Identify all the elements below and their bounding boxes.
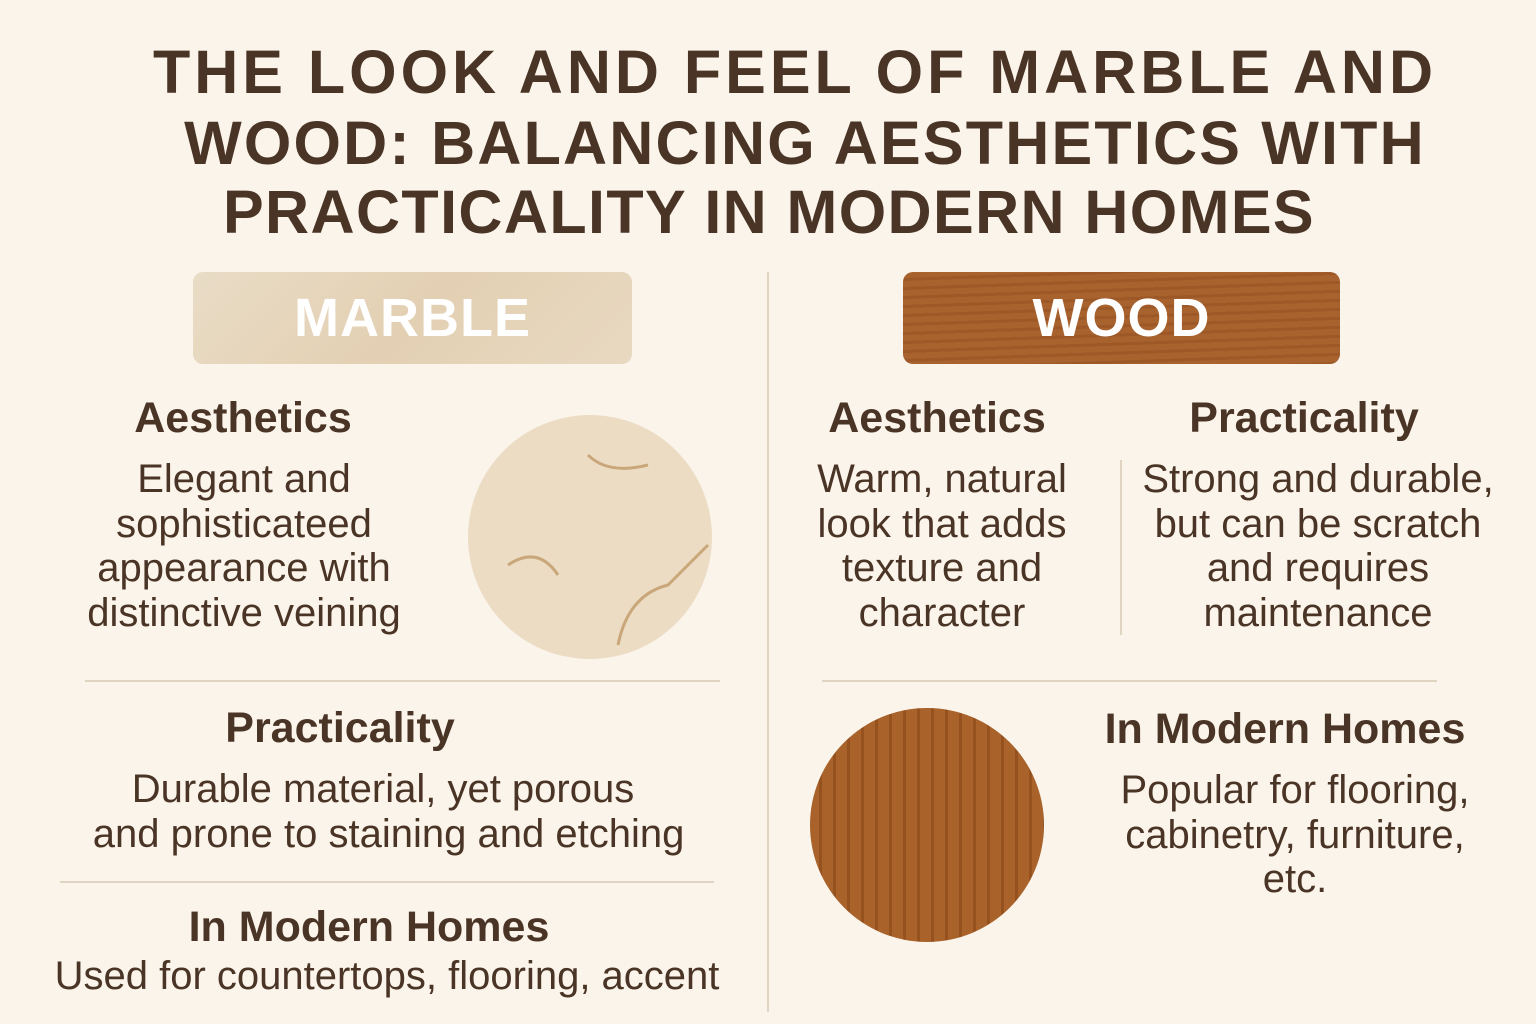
title: THE LOOK AND FEEL OF MARBLE AND [153, 38, 1437, 106]
marble practicality text [93, 767, 684, 856]
marble practicality text: and prone to staining and etching [93, 812, 684, 856]
panel: marble [55, 394, 720, 998]
wood modern homes text: etc. [1263, 857, 1327, 901]
marble modern homes text: Used for countertops, flooring, accent [55, 954, 719, 998]
icon: marble circle [468, 415, 712, 659]
title: PRACTICALITY IN MODERN HOMES [223, 178, 1315, 246]
wood aesthetics text: character [859, 590, 1025, 634]
wood aesthetics text: Warm, natural [817, 457, 1067, 501]
marble aesthetics text: appearance with [97, 546, 391, 590]
wood practicality text: and requires [1207, 546, 1429, 590]
wood aesthetics text: texture and [842, 546, 1042, 590]
wood aesthetics text [817, 457, 1067, 634]
marble practicality heading: Practicality [225, 704, 455, 752]
wood modern homes text: Popular for flooring, [1120, 768, 1470, 812]
marble practicality text: Durable material, yet porous [132, 767, 634, 811]
panel: wood [810, 394, 1494, 942]
marble aesthetics text [87, 457, 401, 634]
marble modern homes heading: In Modern Homes [189, 903, 549, 951]
wood practicality text: but can be scratch [1155, 502, 1481, 546]
wood practicality text [1142, 457, 1494, 634]
badge: wood: WOOD [1032, 288, 1210, 348]
badge: marble: MARBLE [294, 288, 531, 348]
title [153, 38, 1437, 246]
badge: marble [193, 272, 632, 364]
wood practicality text: maintenance [1203, 590, 1433, 634]
wood practicality text: Strong and durable, [1142, 457, 1494, 501]
wood aesthetics text: look that adds [817, 502, 1067, 546]
wood modern homes text [1120, 768, 1470, 901]
title: WOOD: BALANCING AESTHETICS WITH [184, 109, 1426, 177]
wood modern homes text: cabinetry, furniture, [1125, 812, 1465, 856]
marble aesthetics text: distinctive veining [87, 590, 401, 634]
badge: wood [903, 272, 1340, 364]
wood practicality heading: Practicality [1189, 394, 1419, 442]
marble aesthetics text: Elegant and [137, 457, 351, 501]
wood aesthetics heading: Aesthetics [828, 394, 1046, 442]
marble aesthetics text: sophisticateed [116, 502, 372, 546]
wood modern homes heading: In Modern Homes [1105, 705, 1465, 753]
icon: wood circle [810, 708, 1044, 942]
marble aesthetics heading: Aesthetics [134, 394, 352, 442]
